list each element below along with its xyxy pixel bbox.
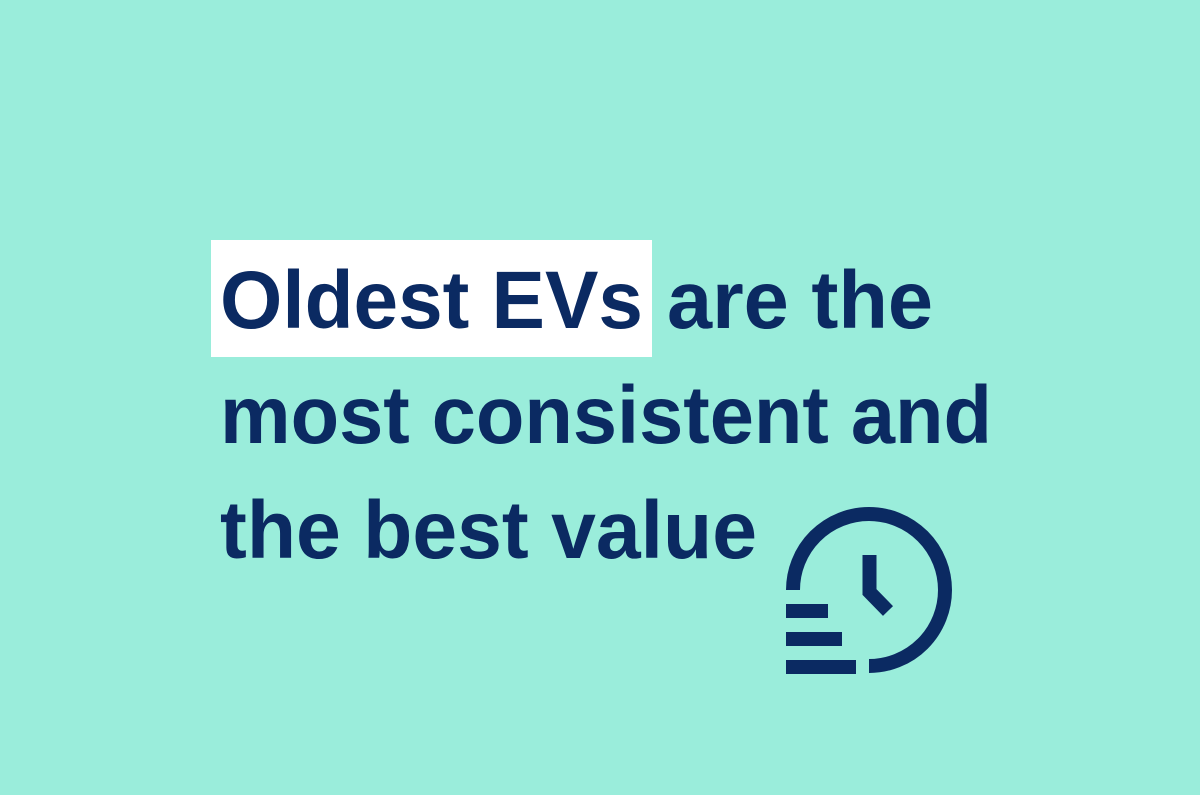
headline line 3: the best value <box>220 485 757 576</box>
highlight box <box>211 240 652 357</box>
headline line 1 rest: are the <box>667 255 933 346</box>
headline line 2: most consistent and <box>220 370 992 461</box>
headline line 1 highlighted: Oldest EVs <box>220 255 643 346</box>
headline <box>211 240 992 576</box>
icon: clock with speed lines <box>786 514 945 667</box>
